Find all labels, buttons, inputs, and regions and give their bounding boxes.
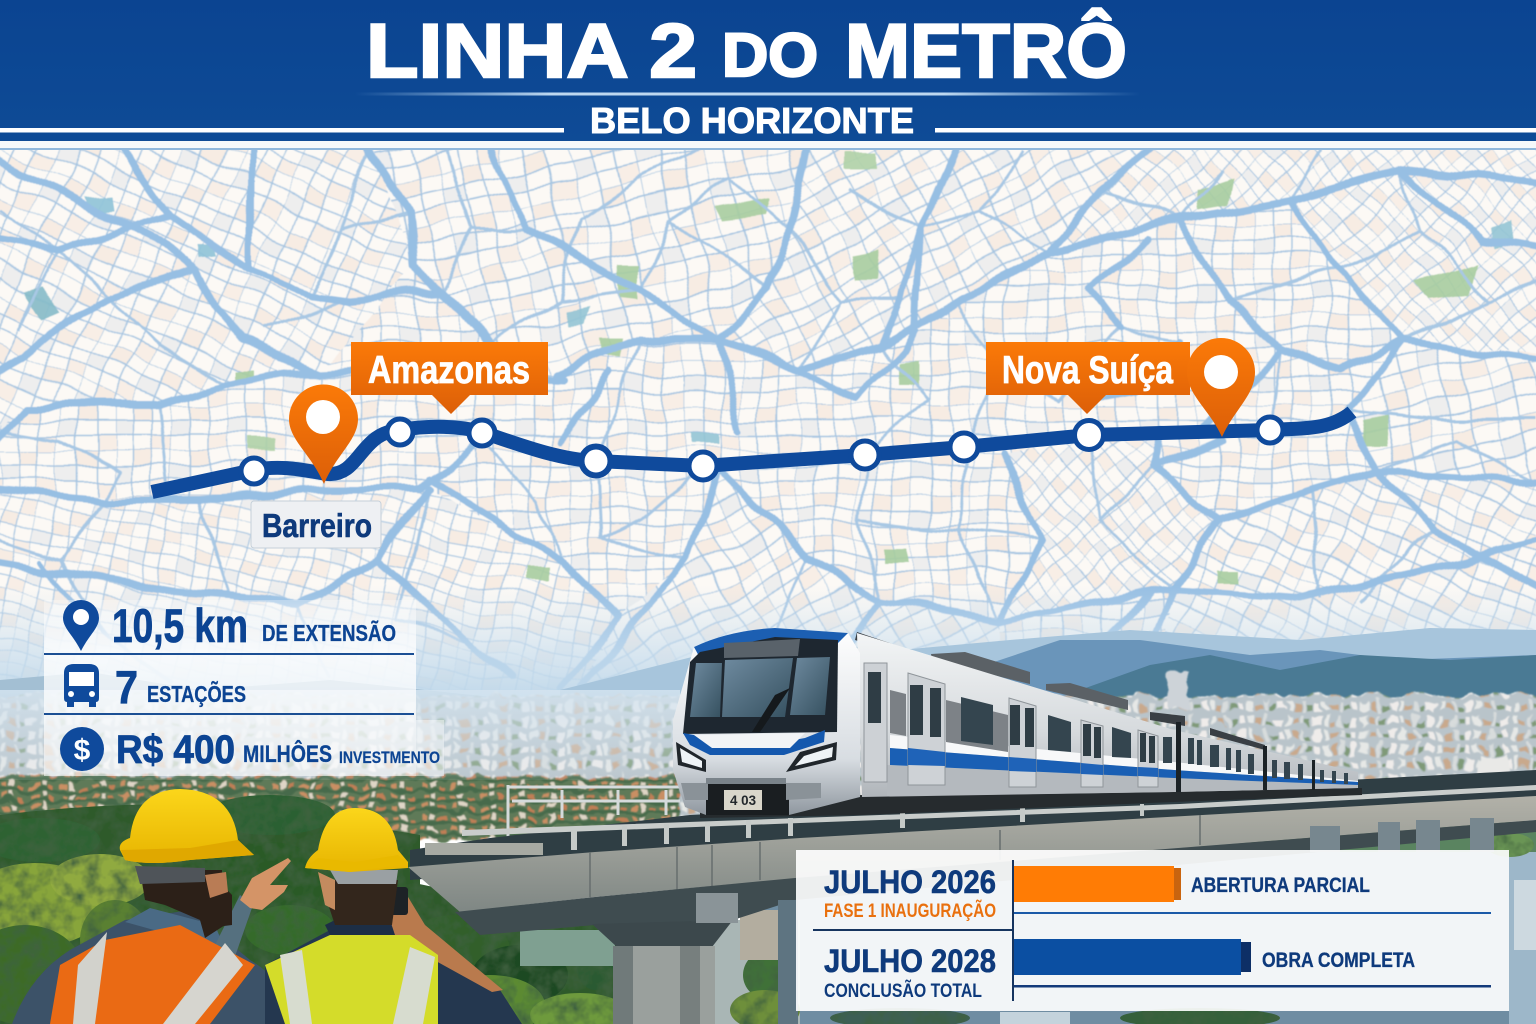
label: Barreiro bbox=[251, 501, 381, 548]
headlights bbox=[676, 742, 706, 772]
lower silver skirt bbox=[887, 765, 1358, 796]
main pier bbox=[592, 893, 738, 1024]
header banner bbox=[0, 0, 1536, 150]
main avenues bbox=[0, 140, 1536, 690]
stat: stations: ESTAÇÕES bbox=[147, 680, 246, 707]
lower bumper bbox=[706, 783, 789, 815]
icon: dollar bbox=[60, 727, 104, 771]
metro train bbox=[673, 628, 1362, 818]
number plate: 4 03 bbox=[730, 792, 756, 808]
panel: key figures bbox=[44, 599, 444, 776]
icon: bus bbox=[64, 664, 99, 707]
deck underside bbox=[455, 820, 1536, 935]
undercarriage bbox=[700, 788, 1362, 818]
title: DO bbox=[722, 21, 818, 89]
label: Amazonas bbox=[351, 342, 548, 414]
stat: stations: 7 bbox=[115, 661, 138, 713]
stat: stations bbox=[115, 661, 246, 713]
stations bbox=[241, 417, 1283, 484]
windshield bbox=[690, 663, 722, 717]
stat: investment: R$ 400 bbox=[116, 728, 235, 772]
stat: investment: MILHÔES bbox=[243, 740, 332, 768]
label: Amazonas: Amazonas bbox=[368, 349, 530, 392]
stat: extension bbox=[112, 599, 396, 652]
label: Nova Suíça bbox=[986, 342, 1190, 414]
date: July 2028: CONCLUSÃO TOTAL bbox=[824, 980, 982, 1002]
roof equipment bbox=[855, 632, 1265, 750]
carriage side bbox=[857, 633, 1358, 797]
stat: extension: DE EXTENSÃO bbox=[262, 619, 396, 646]
cab front bbox=[673, 628, 860, 815]
bar: completion bbox=[1014, 939, 1491, 988]
concrete deck face bbox=[408, 796, 1536, 912]
worker two bbox=[265, 808, 522, 1024]
vest bbox=[50, 925, 255, 1024]
panel: timeline bbox=[796, 850, 1509, 1011]
tinted parks and plazas bbox=[26, 150, 1512, 584]
blue chevron bbox=[683, 730, 825, 755]
elevated viaduct bbox=[408, 770, 1536, 1024]
near guard rail bbox=[425, 785, 1536, 855]
helmet bbox=[305, 808, 408, 872]
date: July 2028: JULHO 2028 bbox=[824, 943, 996, 979]
bar: phase 1 bbox=[1014, 866, 1491, 914]
title: LINHA 2 bbox=[366, 9, 697, 94]
windows and doors bbox=[864, 663, 1348, 792]
pin: Nova Suíça bbox=[1187, 338, 1255, 437]
destination sign bbox=[724, 639, 800, 658]
label: Nova Suíça: Nova Suíça bbox=[1002, 349, 1173, 392]
helmet bbox=[120, 789, 254, 863]
cityscape bbox=[0, 672, 1536, 840]
pin: Barreiro bbox=[289, 384, 358, 484]
vest bbox=[265, 935, 438, 1024]
far guard rail bbox=[507, 785, 680, 840]
label: Barreiro: Barreiro bbox=[262, 507, 372, 544]
title: METRÔ bbox=[845, 9, 1127, 94]
route line with stations bbox=[152, 412, 1352, 492]
date: July 2026: JULHO 2026 bbox=[824, 864, 996, 900]
stat: extension: 10,5 km bbox=[112, 599, 248, 652]
date: July 2026 bbox=[824, 864, 996, 922]
worker one bbox=[12, 789, 295, 1024]
lower background: trees and city behind the bridge bbox=[0, 795, 1536, 1024]
subtitle: BELO HORIZONTE bbox=[590, 100, 914, 141]
secondary streets bbox=[0, 150, 1536, 680]
white band and blue stripe bbox=[890, 735, 1358, 782]
icon: dollar: $ bbox=[74, 734, 91, 767]
date: July 2026: FASE 1 INAUGURAÇÃO bbox=[824, 900, 996, 922]
date: July 2028 bbox=[824, 943, 996, 1002]
icon: location pin bbox=[63, 600, 99, 651]
number plate bbox=[724, 790, 762, 810]
far piers bbox=[1310, 818, 1494, 852]
stat: investment bbox=[116, 728, 440, 772]
title bbox=[366, 9, 1127, 94]
stat: investment: INVESTMENTO bbox=[339, 748, 440, 767]
city street map bbox=[0, 125, 1536, 725]
bar: completion: OBRA COMPLETA bbox=[1262, 949, 1415, 972]
mountains bbox=[0, 628, 1536, 720]
bar: phase 1: ABERTURA PARCIAL bbox=[1191, 874, 1370, 897]
haze fading the map into the landscape bbox=[0, 585, 1536, 710]
workers bbox=[12, 789, 522, 1024]
subtitle bbox=[0, 100, 1536, 141]
